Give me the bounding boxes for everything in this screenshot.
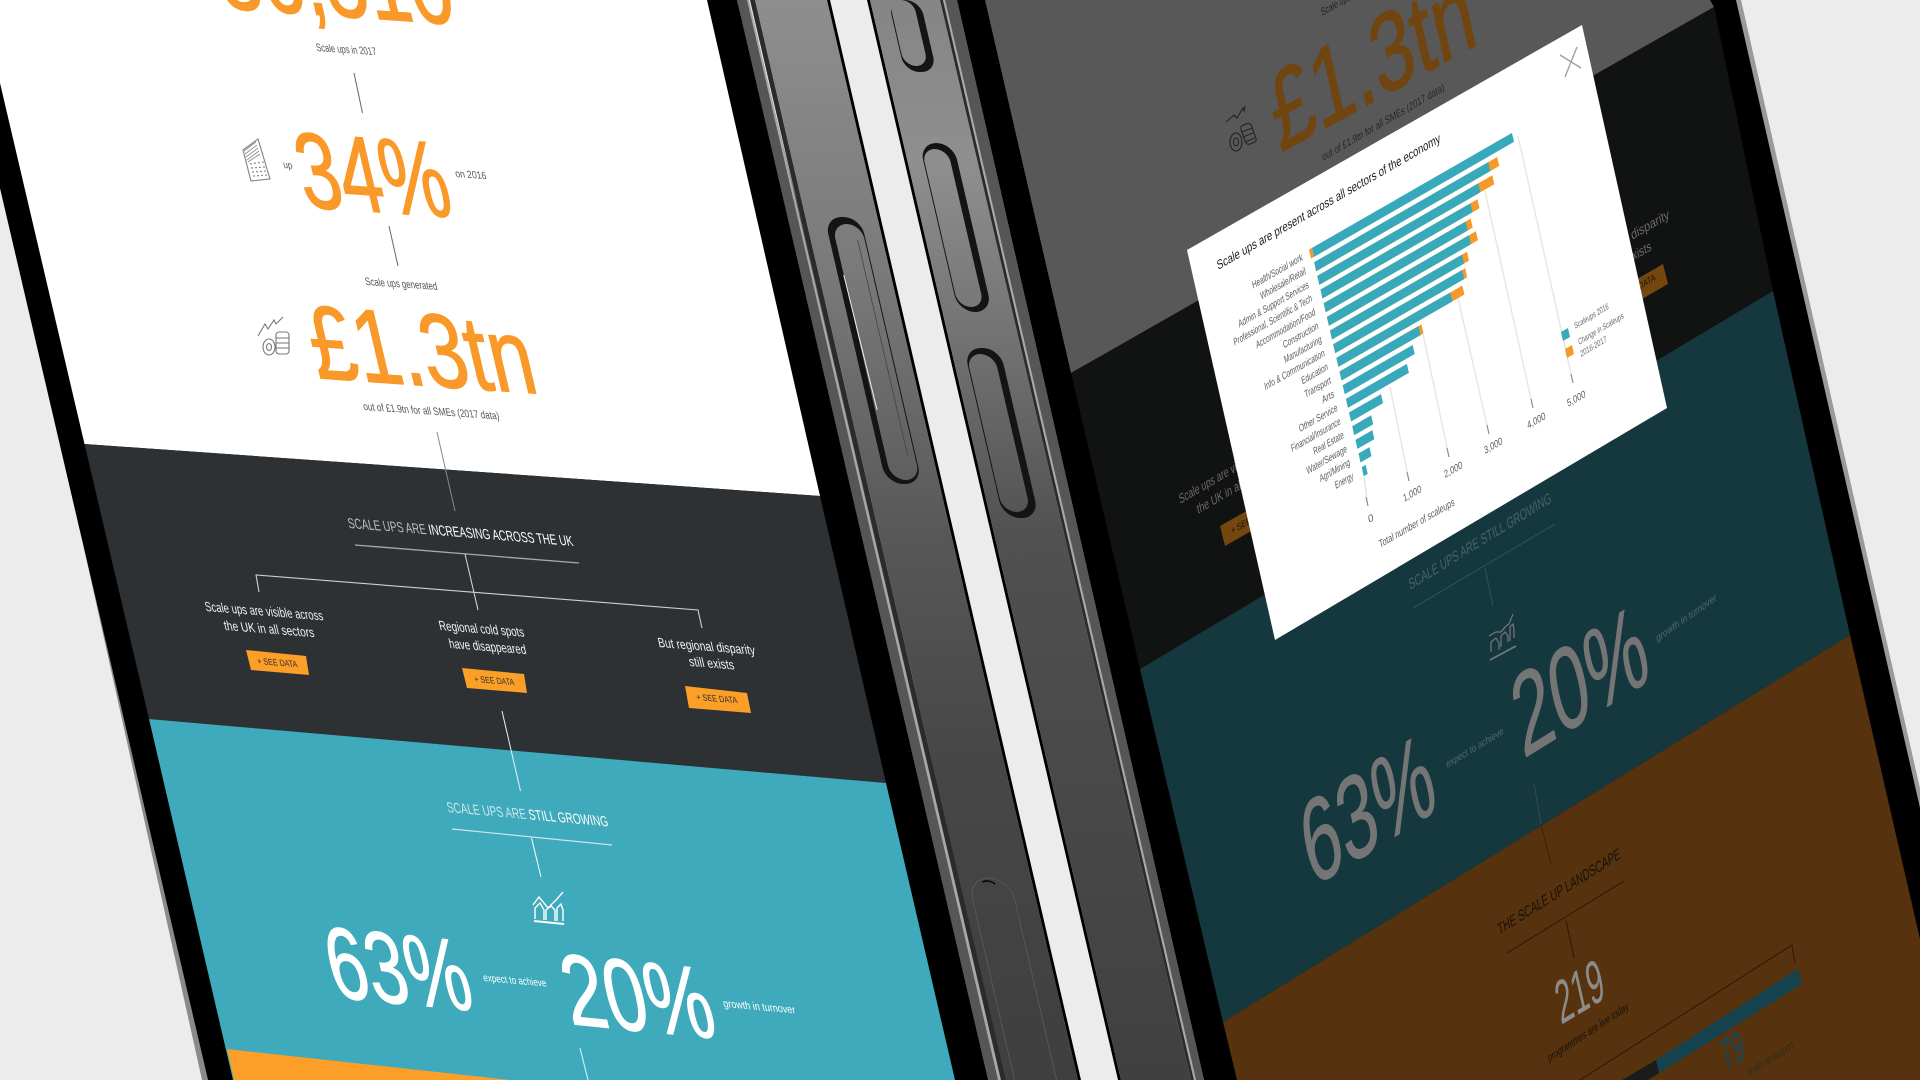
icon: coins dimmed	[1226, 106, 1257, 151]
legend: 2016-2017	[1579, 334, 1607, 359]
modal panel: sectors chart	[1187, 25, 1667, 640]
heading: still growing dimmed: SCALE UPS ARE STILL GROWING	[1407, 490, 1553, 594]
column: cold spots disappeared: Regional cold spots	[437, 618, 526, 640]
legend: Scaleups 2016	[1573, 301, 1609, 331]
x axis labels: 5,000	[1566, 388, 1587, 410]
sector labels: Accommodation/Food	[1255, 306, 1316, 351]
sector labels: Financial/Insurance	[1290, 416, 1342, 455]
stat: 63 percent dimmed: 63%	[1289, 708, 1446, 912]
stat: 219 programmes: 219	[1549, 945, 1610, 1038]
x axis labels: 0	[1367, 512, 1375, 526]
sector labels: Education	[1301, 361, 1329, 387]
heading: the scale up landscape: THE SCALE UP LANDSCAPE	[1496, 845, 1622, 939]
column: disparity still exists: still exists	[687, 654, 736, 673]
heading: still growing: SCALE UPS ARE STILL GROWING	[445, 800, 610, 830]
column: cold spots disappeared	[437, 618, 528, 693]
sector labels: Info & Communication	[1263, 347, 1326, 393]
right phone body	[867, 0, 1920, 1080]
left phone screen	[0, 0, 955, 1080]
long rule	[1580, 945, 1795, 1080]
icon: growth chart dimmed	[1489, 614, 1516, 660]
x axis labels: 3,000	[1483, 435, 1504, 457]
icon: calculator	[243, 139, 270, 181]
x axis labels: 1,000	[1402, 483, 1423, 505]
sector labels: Agri/Mining	[1319, 457, 1351, 485]
stat: 20 percent dimmed: 20%	[1501, 579, 1658, 783]
icon: coins and rising line	[258, 317, 289, 355]
caption: expect to achieve: expect to achieve	[482, 972, 548, 990]
caption: growth in turnover dimmed: growth in turnover	[1655, 592, 1718, 645]
dimmed brown section	[1496, 845, 1802, 1080]
caption: out of 1.9tn: out of £1.9tn for all SMEs (2017 data)	[1321, 82, 1446, 164]
sector labels	[1233, 252, 1355, 492]
stat: 20 percent: 20%	[549, 931, 725, 1061]
sector labels: Health/Social work	[1251, 252, 1304, 291]
stat: 1.3tn generated: Scale ups generated	[364, 276, 439, 293]
dimmed dark section text	[1178, 207, 1671, 546]
column: disparity still exists	[656, 635, 757, 713]
stat: up 34 percent: on 2016	[454, 168, 488, 182]
x axis labels	[1367, 388, 1587, 526]
caption: expect to achieve dimmed: expect to achieve	[1445, 726, 1505, 771]
close icon	[1560, 47, 1581, 77]
stacked bars	[1309, 133, 1514, 476]
left phone body	[0, 0, 1081, 1080]
dimmed grey section text	[1226, 0, 1485, 176]
stat: 1.3tn generated: £1.3tn	[296, 283, 546, 416]
stat: 79: 79	[1716, 1020, 1748, 1080]
stat: 1.3tn generated: out of £1.9tn for all SMEs (2017 data)	[362, 401, 501, 422]
sector labels: Construction	[1282, 320, 1320, 351]
sector labels: Manufacturing	[1283, 334, 1323, 366]
dimmed dark section text: But regional disparity	[1573, 207, 1671, 277]
stat: 63 percent: 63%	[313, 904, 482, 1033]
sector labels: Professional, Scientific & Tech	[1233, 293, 1313, 349]
teal section	[313, 711, 797, 1080]
column: disparity still exists: But regional disparity	[656, 635, 757, 658]
dimmed teal section	[1289, 490, 1718, 912]
legend: Change in Scaleups	[1577, 311, 1625, 347]
column: visible in all sectors: + SEE DATA	[256, 656, 299, 669]
bracket connector	[256, 575, 702, 628]
sector labels: Water/Sewage	[1306, 443, 1348, 477]
dimmed dark section text: the UK in all sectors	[1196, 460, 1274, 518]
stat: up 34 percent: 34%	[283, 110, 462, 241]
column: cold spots disappeared: + SEE DATA	[473, 674, 516, 687]
sector labels: Arts	[1321, 388, 1336, 406]
right phone screen	[985, 0, 1920, 1080]
sector labels: Transport	[1304, 375, 1332, 401]
column: visible in all sectors	[203, 599, 325, 675]
legend	[1561, 301, 1625, 359]
side button slots	[764, 0, 1171, 1080]
column: disparity still exists: + SEE DATA	[695, 692, 739, 705]
dark section	[203, 432, 757, 713]
sector labels: Admin & Support Services	[1237, 279, 1310, 330]
x axis title: Total number of scaleups	[1378, 497, 1456, 551]
stat: up 34 percent: up	[282, 160, 294, 172]
x axis labels: 4,000	[1526, 410, 1547, 432]
stat: scale ups in 2017: Scale ups in 2017	[315, 42, 378, 58]
caption: under 79: scale up support	[1746, 1039, 1795, 1079]
column: cold spots disappeared: have disappeared	[447, 636, 528, 657]
icon: growth chart	[533, 892, 564, 924]
dimmed dark section text: Scale ups are visible across	[1178, 435, 1281, 508]
dimmed dark section text: + SEE DATA	[1616, 272, 1657, 305]
caption: programmes: programmes are live today	[1547, 999, 1630, 1065]
axis ticks	[1366, 374, 1573, 506]
column: visible in all sectors: the UK in all sectors	[222, 618, 316, 640]
sector labels: Wholesale/Retail	[1259, 265, 1307, 302]
dimmed dark section text: + SEE DATA	[1230, 504, 1271, 537]
caption: growth in turnover: growth in turnover	[722, 998, 797, 1016]
sector labels: Energy	[1334, 470, 1355, 492]
sector labels: Real Estate	[1312, 429, 1345, 458]
heading: increasing across the UK: SCALE UPS ARE INCREASING ACROSS THE UK	[346, 516, 575, 550]
chart title: Scale ups are present across all sectors of the economy	[1216, 131, 1442, 273]
grid lines	[1364, 136, 1573, 506]
x axis labels: 2,000	[1443, 459, 1464, 481]
white section statistics	[202, 0, 546, 422]
dimmed dark section text: still exists	[1610, 239, 1653, 277]
column: visible in all sectors: Scale ups are visible across	[203, 599, 325, 623]
sector labels: Other Service	[1298, 402, 1339, 435]
stacked bar	[1622, 969, 1802, 1080]
